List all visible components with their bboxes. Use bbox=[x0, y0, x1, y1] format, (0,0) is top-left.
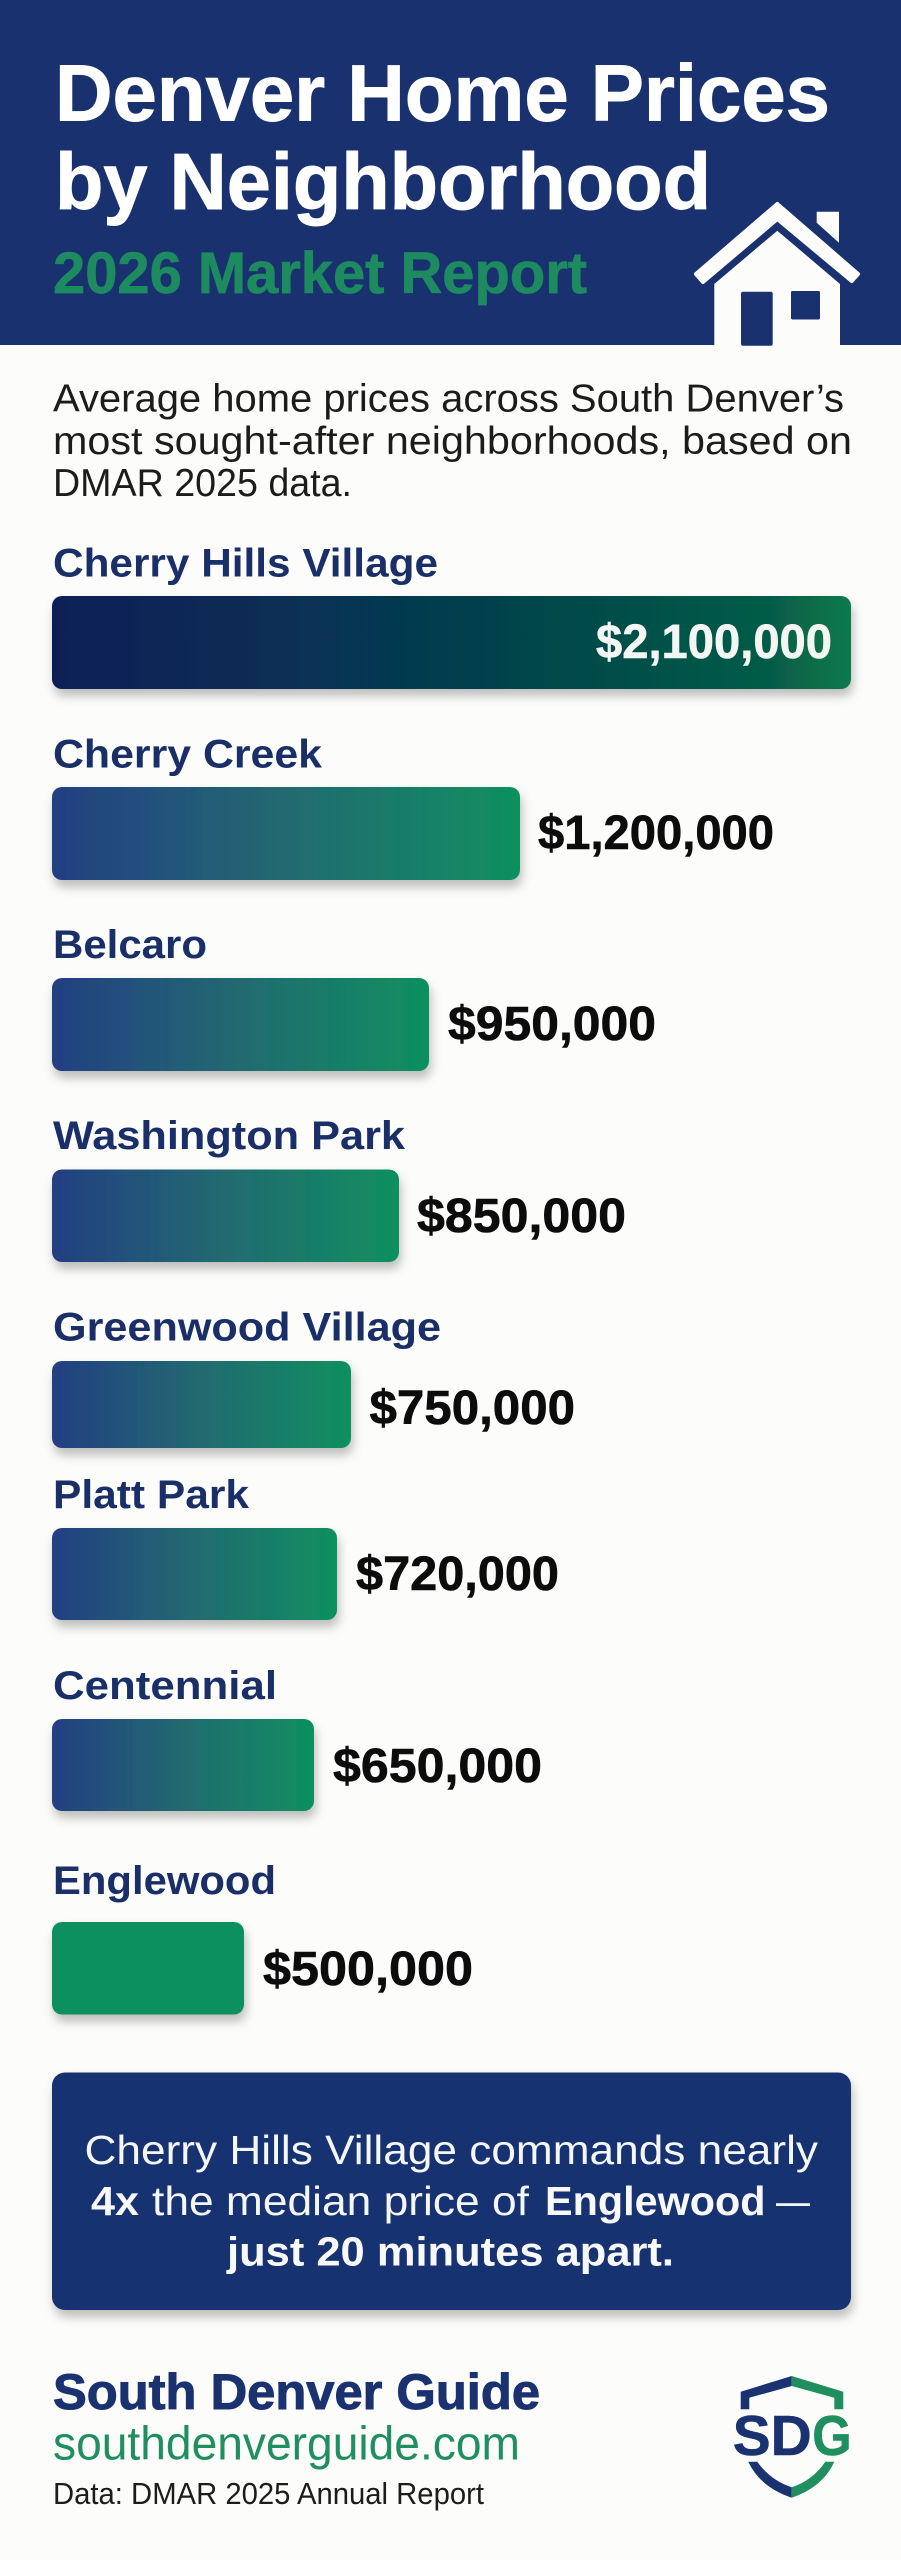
bar row: Cherry Hills Village bbox=[52, 542, 851, 689]
bar row: Washington Park: Washington Park bbox=[53, 1114, 406, 1158]
icon: SDG shield logo: G bbox=[812, 2404, 852, 2468]
bar row: Cherry Creek: $1,200,000 bbox=[538, 807, 774, 860]
callout: 4x bbox=[91, 2178, 139, 2224]
intro text bbox=[53, 378, 852, 505]
title: by Neighborhood bbox=[55, 137, 711, 226]
bar row: Centennial bbox=[52, 1664, 542, 1811]
bar row: Greenwood Village: $750,000 bbox=[370, 1382, 575, 1435]
callout: — bbox=[776, 2178, 810, 2224]
subtitle: 2026 Market Report bbox=[53, 241, 587, 306]
callout: Englewood bbox=[545, 2178, 766, 2224]
footer website: southdenverguide.com bbox=[53, 2417, 520, 2470]
footer data source: Data: DMAR 2025 Annual Report bbox=[53, 2476, 484, 2511]
intro text: Average home prices across South Denver’s bbox=[53, 378, 844, 420]
bar row: Belcaro bbox=[52, 923, 656, 1071]
icon: house bbox=[696, 204, 858, 346]
bar row: Cherry Hills Village: Cherry Hills Village bbox=[53, 542, 438, 586]
bar row: Englewood: Englewood bbox=[53, 1859, 276, 1903]
bar row: Platt Park: Platt Park bbox=[53, 1473, 250, 1517]
callout: just 20 minutes apart. bbox=[226, 2228, 674, 2274]
bar row: Greenwood Village bbox=[52, 1306, 575, 1448]
bar row: Greenwood Village: Greenwood Village bbox=[53, 1306, 441, 1350]
intro text: most sought-after neighborhoods, based on bbox=[53, 420, 852, 463]
bar row: Platt Park: $720,000 bbox=[356, 1548, 559, 1601]
bar row: Cherry Hills Village: $2,100,000 bbox=[596, 616, 832, 669]
title bbox=[55, 48, 830, 226]
bar row: Centennial: $650,000 bbox=[333, 1740, 542, 1793]
bar row: Cherry Creek bbox=[52, 733, 774, 880]
bar row: Belcaro: Belcaro bbox=[53, 923, 207, 967]
bar row: Washington Park: $850,000 bbox=[417, 1190, 626, 1243]
icon: SDG shield logo: SD bbox=[733, 2404, 812, 2468]
callout bbox=[52, 2072, 851, 2310]
bar row: Centennial: Centennial bbox=[53, 1664, 277, 1708]
icon: SDG shield logo bbox=[733, 2376, 852, 2498]
bar row: Englewood bbox=[52, 1859, 473, 2014]
footer brand name: South Denver Guide bbox=[53, 2364, 540, 2420]
bar row: Cherry Creek: Cherry Creek bbox=[53, 733, 323, 777]
header banner bbox=[0, 0, 901, 346]
bar row: Platt Park bbox=[52, 1473, 559, 1620]
intro text: DMAR 2025 data. bbox=[53, 462, 352, 505]
bar row: Washington Park bbox=[52, 1114, 626, 1262]
callout: the median price of bbox=[152, 2178, 530, 2224]
bar row: Belcaro: $950,000 bbox=[448, 998, 656, 1051]
bar row: Englewood: $500,000 bbox=[263, 1943, 473, 1996]
callout: Cherry Hills Village commands nearly bbox=[84, 2127, 819, 2173]
title: Denver Home Prices bbox=[55, 48, 830, 138]
